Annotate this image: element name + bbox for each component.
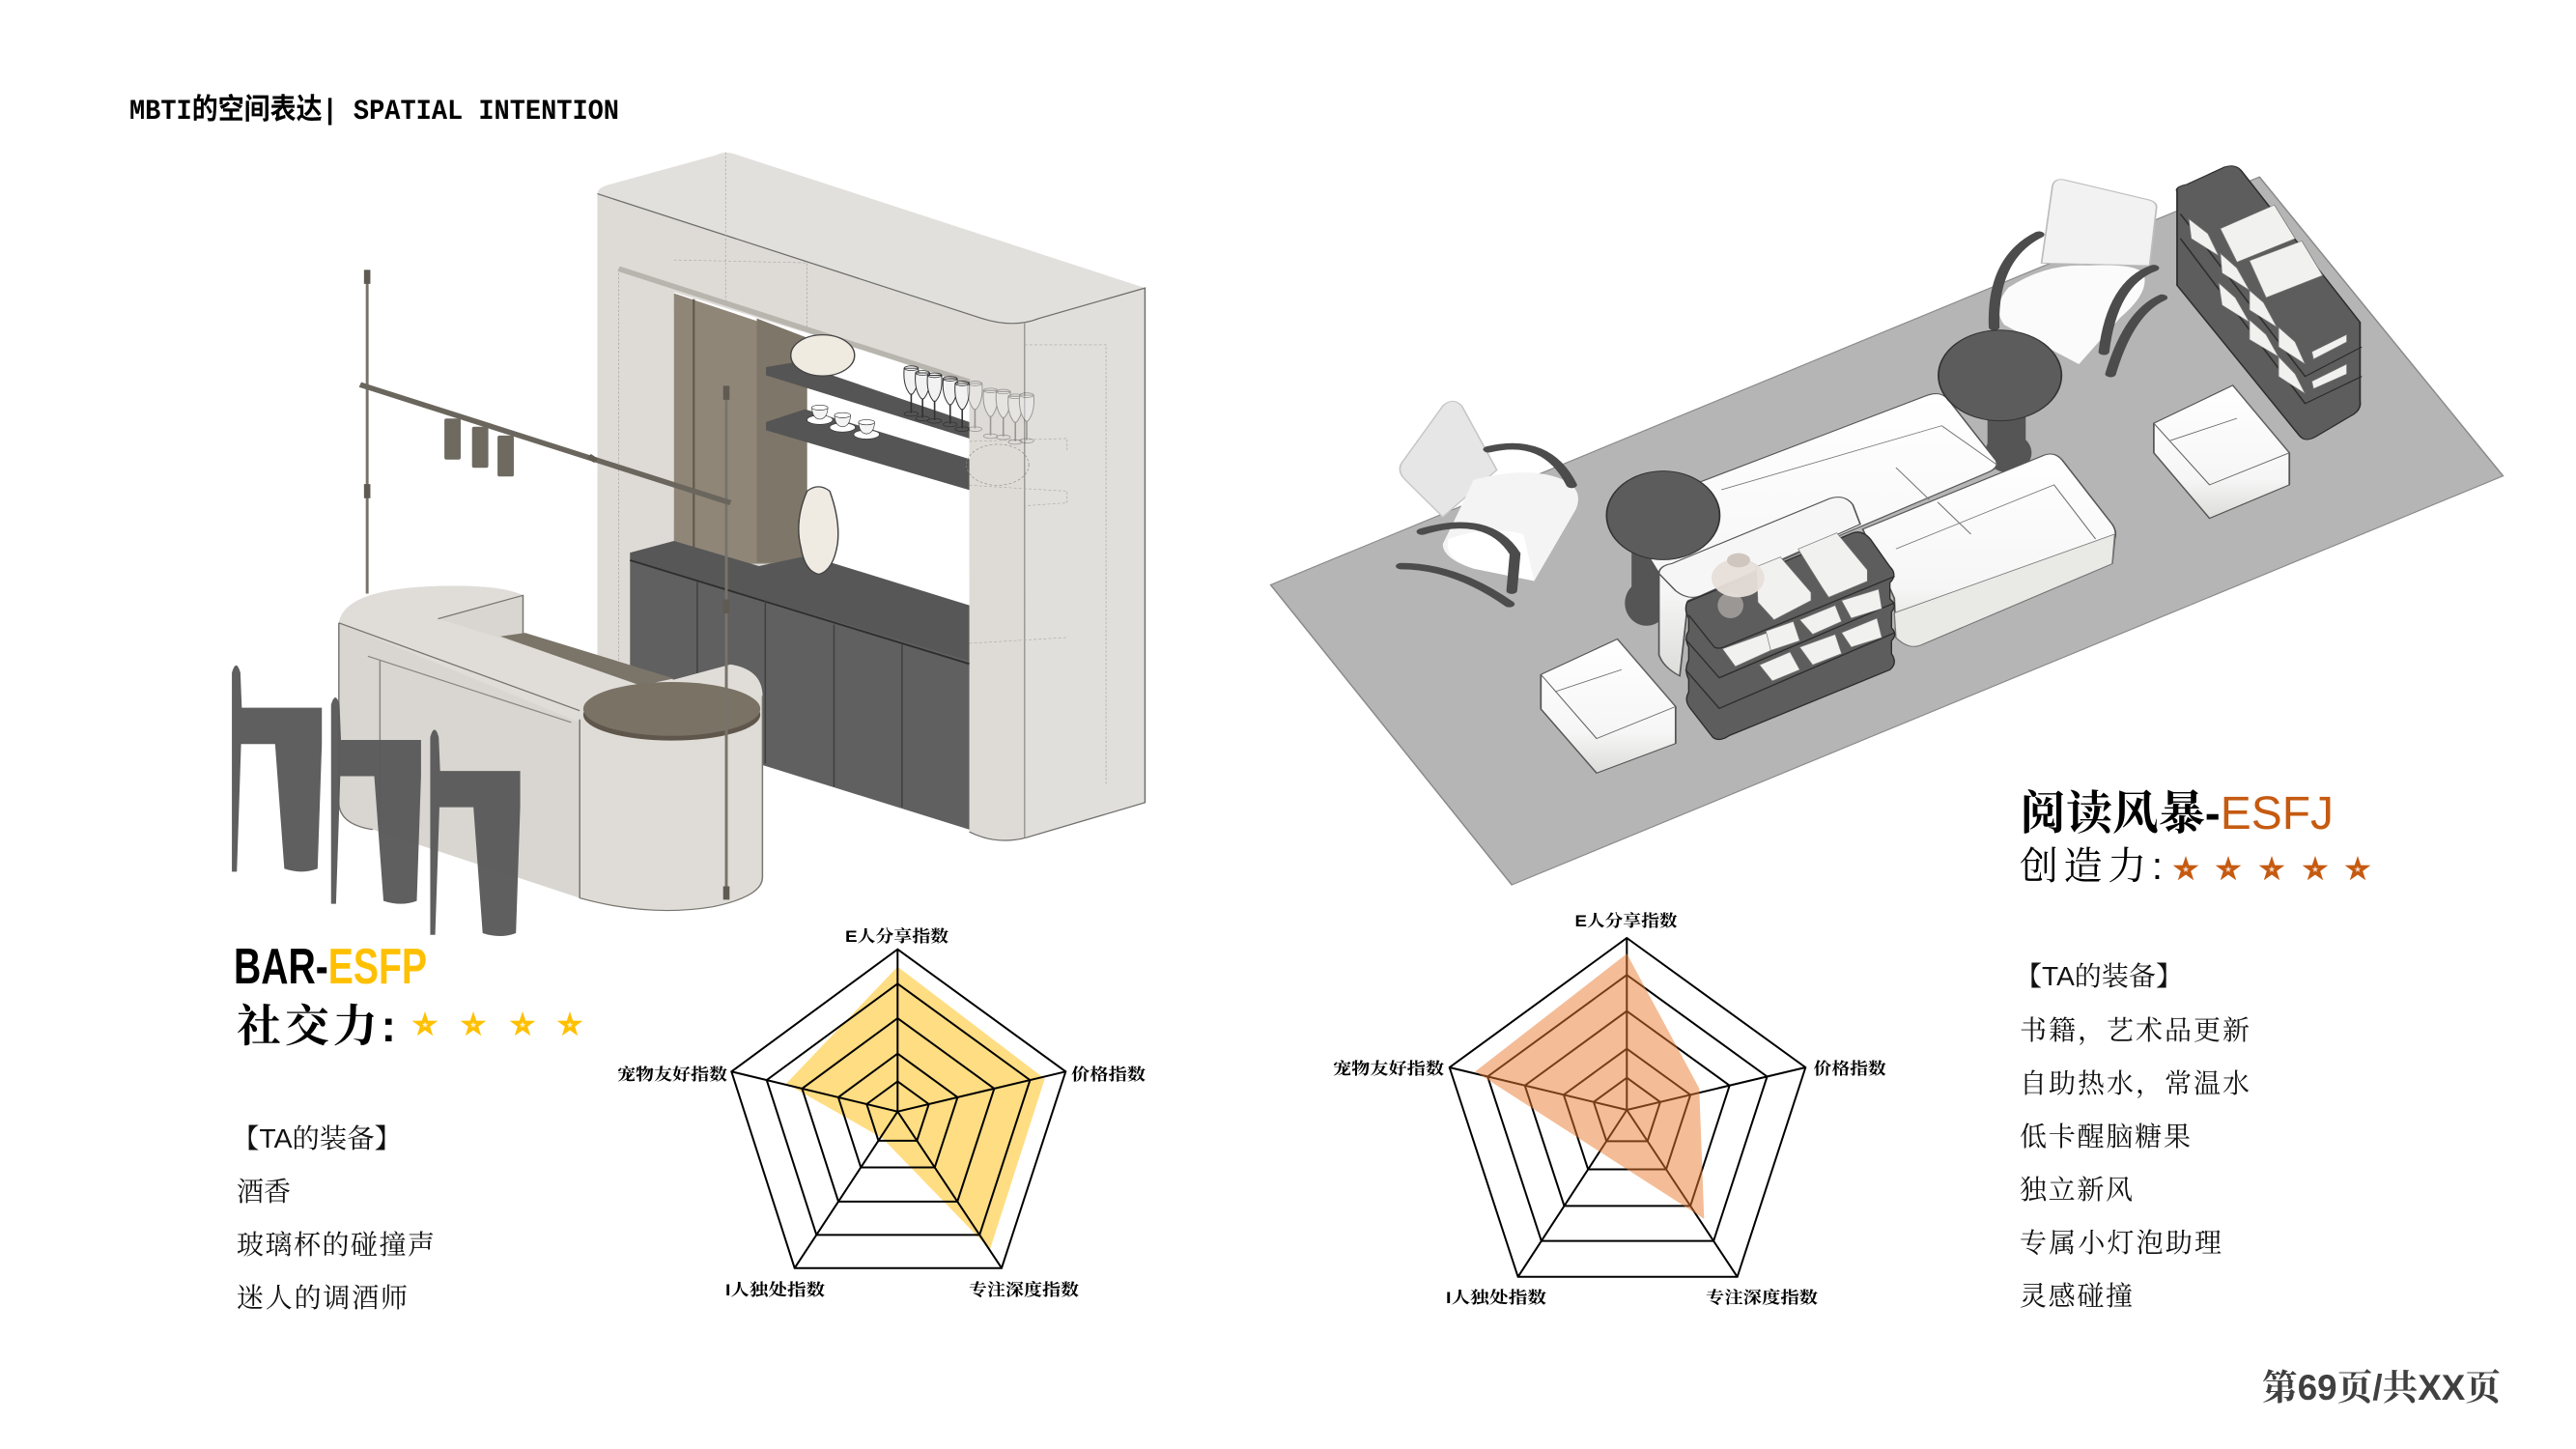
sofa front [1863, 454, 2115, 646]
axis labels: ESFJ: E人分享指数 [1574, 911, 1677, 930]
ottoman right [2154, 385, 2289, 519]
heading: BAR-ESFP: BAR-ESFP [234, 939, 427, 995]
equipment list: reading: 独立新风 [2020, 1175, 2133, 1205]
rating label: creativity: 创造力: [2020, 845, 2163, 888]
equipment list: bar: 【TA的装备】 [232, 1123, 402, 1153]
equipment list: reading: 专属小灯泡助理 [2020, 1228, 2222, 1258]
axis labels: ESFJ [1333, 911, 1886, 1307]
ottoman left [1541, 639, 1676, 773]
round bar top [583, 682, 760, 741]
wine glasses [904, 366, 1033, 485]
equipment list: reading: 灵感碰撞 [2020, 1281, 2133, 1311]
equipment list: reading: 书籍，艺术品更新 [2020, 1015, 2250, 1045]
axis labels: ESFP: 宠物友好指数 [617, 1065, 727, 1084]
axis labels: ESFJ: 专注深度指数 [1706, 1288, 1818, 1307]
equipment list: reading [2015, 961, 2250, 1311]
left armchair [1400, 401, 1578, 604]
equipment list: reading: 自助热水，常温水 [2020, 1068, 2250, 1098]
illustration: bar scene [232, 153, 1145, 936]
radar grid: ESFJ [1450, 938, 1805, 1277]
axis labels: ESFP: I人独处指数 [725, 1280, 825, 1299]
carpet [1270, 177, 2504, 885]
data area: ESFP [786, 967, 1045, 1249]
radar grid: ESFP [731, 950, 1065, 1268]
shelves [766, 362, 970, 490]
right armchair [1994, 180, 2162, 374]
data area: ESFJ [1475, 953, 1704, 1219]
axis labels: ESFJ: 宠物友好指数 [1333, 1059, 1444, 1078]
axis labels: ESFP [617, 926, 1146, 1299]
equipment list: bar: 迷人的调酒师 [237, 1283, 408, 1313]
side table tops [1606, 330, 2061, 559]
axis labels: ESFJ: I人独处指数 [1446, 1288, 1546, 1307]
round vase [791, 335, 855, 376]
equipment list: reading: 低卡醒脑糖果 [2020, 1122, 2191, 1151]
equipment list: bar [232, 1123, 435, 1313]
side table bases [1625, 411, 2031, 626]
cups on shelf [807, 405, 879, 439]
heading: 阅读风暴-ESFJ: 阅读风暴-ESFJ [2020, 788, 2334, 839]
bookshelf back [2177, 166, 2362, 440]
bar back wall [598, 153, 1145, 840]
illustration: reading lounge [1270, 166, 2504, 885]
axis labels: ESFP: E人分享指数 [845, 926, 948, 946]
rating label: social power: 社交力: [237, 1001, 396, 1051]
equipment list: bar: 玻璃杯的碰撞声 [237, 1230, 435, 1260]
header band edge [619, 269, 970, 382]
bookshelf front [1685, 532, 1895, 739]
stools [232, 666, 521, 936]
equipment list: reading: 【TA的装备】 [2015, 961, 2183, 991]
radar chart: ESFJ [1333, 911, 1886, 1307]
sofa back [1622, 394, 1997, 676]
wall opening [674, 292, 970, 606]
cabinet [630, 541, 970, 830]
rating stars: five orange [2173, 856, 2370, 880]
axis labels: ESFP: 专注深度指数 [969, 1280, 1079, 1299]
rating stars: four yellow [412, 1011, 582, 1036]
axis labels: ESFP: 价格指数 [1071, 1065, 1146, 1084]
page number: 第69页/共XX页 [2262, 1368, 2501, 1407]
equipment list: bar: 酒香 [237, 1177, 291, 1207]
axis labels: ESFJ: 价格指数 [1814, 1059, 1886, 1078]
wooden column [674, 294, 807, 564]
title: MBTI的空间表达| SPATIAL INTENTION [129, 94, 619, 128]
bar counter [339, 585, 762, 911]
radar chart: ESFP [617, 926, 1146, 1299]
vase on bookshelf [1712, 554, 1765, 618]
track light [360, 270, 730, 899]
tall vase [799, 487, 838, 574]
